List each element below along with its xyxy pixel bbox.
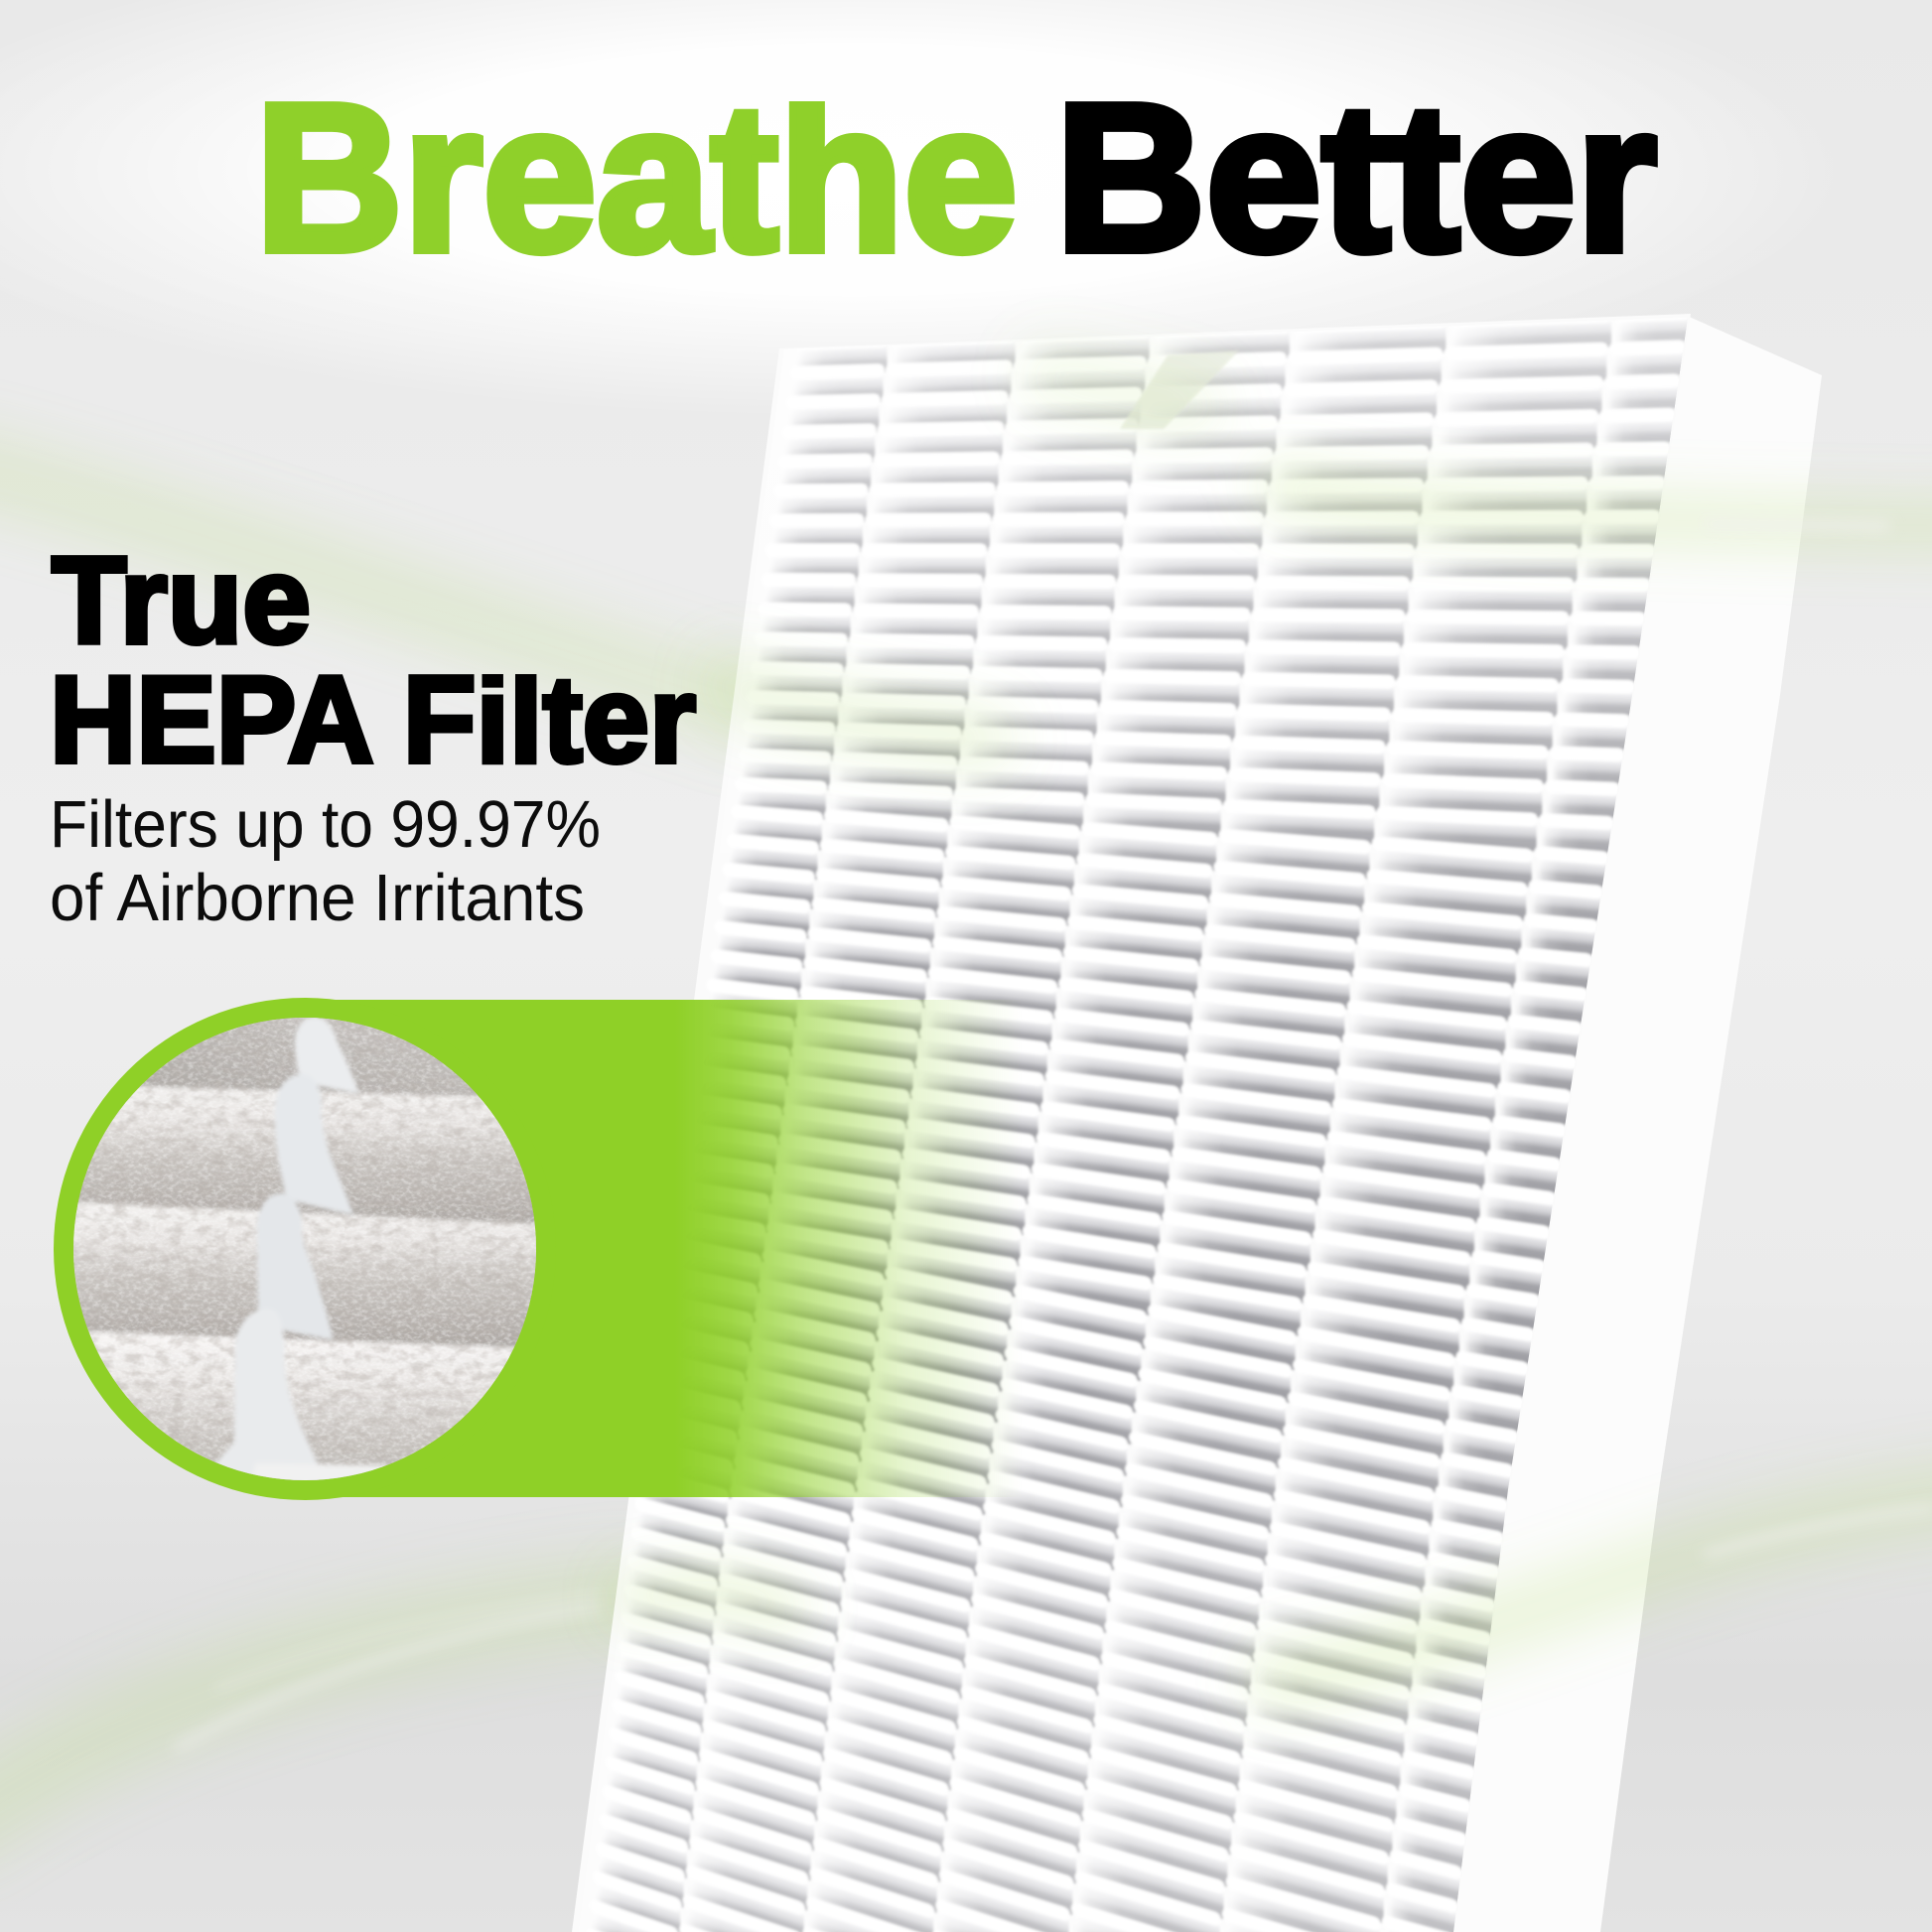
green callout band — [298, 1000, 1023, 1497]
heading: True HEPA Filter — [50, 555, 697, 765]
pale streaks inside the right-hand wisps — [1708, 524, 1932, 1554]
heading: True HEPA Filter: True — [52, 532, 311, 669]
background air wisps: green streaks behind filter — [0, 467, 755, 1822]
subheading: filtration claim — [50, 787, 601, 935]
air wisps crossing the filter — [635, 377, 1932, 1678]
macro photo of filter fibres — [69, 1013, 546, 1489]
glue spine beads — [210, 1017, 387, 1489]
title word: Breathe: Breathe — [255, 60, 1018, 295]
title — [264, 101, 1658, 256]
filter tab ribbon — [1120, 350, 1239, 429]
magnified filter photo in circle — [54, 998, 556, 1500]
filter pleats — [597, 322, 1687, 1932]
green circle ring — [54, 998, 556, 1500]
subheading: filtration claim: Filters up to 99.97% — [50, 787, 601, 862]
filter side wall — [1453, 316, 1822, 1932]
title word: Better: Better — [1055, 60, 1657, 295]
filter front frame — [572, 314, 1691, 1932]
heading: True HEPA Filter: HEPA Filter — [50, 651, 696, 788]
subheading: filtration claim: of Airborne Irritants — [50, 861, 585, 935]
HEPA filter — [496, 298, 1822, 1932]
